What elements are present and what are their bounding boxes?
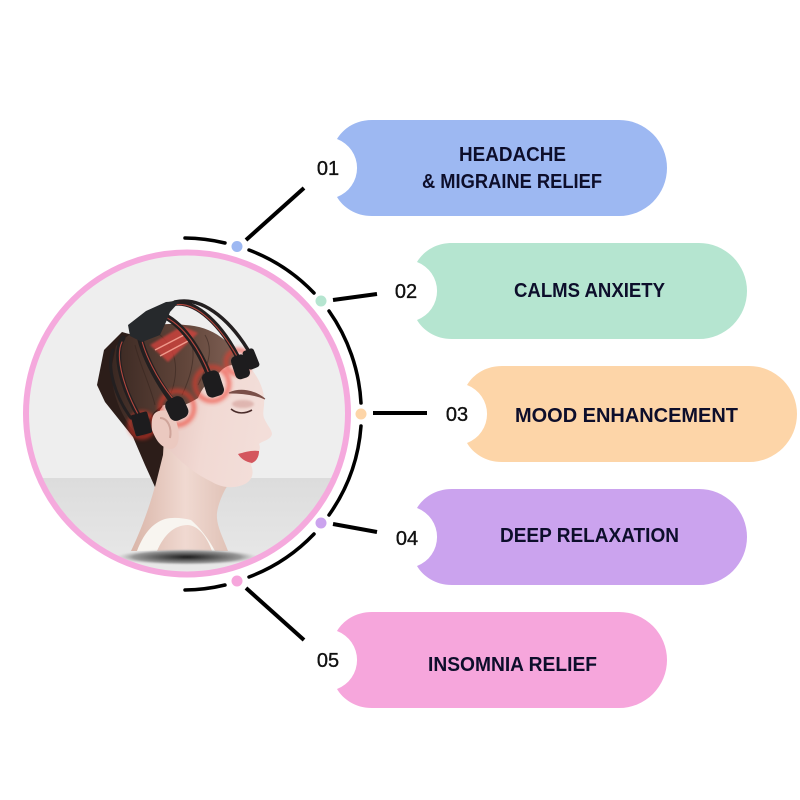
white top strap (137, 518, 215, 551)
outer black arc (185, 238, 361, 590)
pill 01 (337, 120, 667, 216)
pill 05 (337, 612, 667, 708)
label 03: MOOD ENHANCEMENT (515, 405, 738, 427)
headset pads (130, 347, 260, 437)
photo: woman wearing red light therapy headset (20, 248, 355, 580)
photo background wall (20, 248, 355, 480)
headset hub (128, 301, 180, 342)
panel: 04 deep relaxation (396, 489, 747, 585)
label 01: HEADACHE (459, 144, 566, 166)
label 02: CALMS ANXIETY (514, 280, 666, 302)
red glows around pads (130, 350, 250, 437)
lips (238, 451, 259, 463)
ear inner (160, 418, 171, 438)
eyebrow (229, 390, 265, 399)
connector lines (246, 188, 427, 640)
pill 03 (467, 366, 797, 462)
eye shadow (232, 400, 254, 408)
hair crown (112, 324, 234, 432)
neck and shoulder (131, 446, 228, 551)
ear (152, 410, 179, 449)
eye closed (231, 409, 252, 413)
number 05: 05 (317, 650, 339, 672)
number 02: 02 (395, 281, 417, 303)
floor shadow (115, 549, 259, 565)
number 01: 01 (317, 158, 339, 180)
hair strands (135, 330, 209, 405)
label 04: DEEP RELAXATION (500, 525, 679, 547)
photo background floor (43, 478, 331, 572)
pill 04 (417, 489, 747, 585)
panel: 01 headache and migraine relief (317, 120, 667, 216)
face (160, 354, 272, 487)
number 04: 04 (396, 528, 418, 550)
pill 02 (417, 243, 747, 339)
headset red accents (119, 304, 238, 414)
connector dots (232, 241, 366, 586)
label 05: INSOMNIA RELIEF (428, 654, 597, 676)
panel: 03 mood enhancement (446, 366, 797, 462)
headset arms (111, 301, 251, 418)
red glow on scalp (150, 326, 198, 362)
number 03: 03 (446, 404, 468, 426)
panel: 05 insomnia relief (317, 612, 667, 708)
label 01 second line: & MIGRAINE RELIEF (422, 171, 602, 193)
panel: 02 calms anxiety (395, 243, 747, 339)
pink ring (26, 252, 348, 574)
back hair (97, 332, 165, 487)
